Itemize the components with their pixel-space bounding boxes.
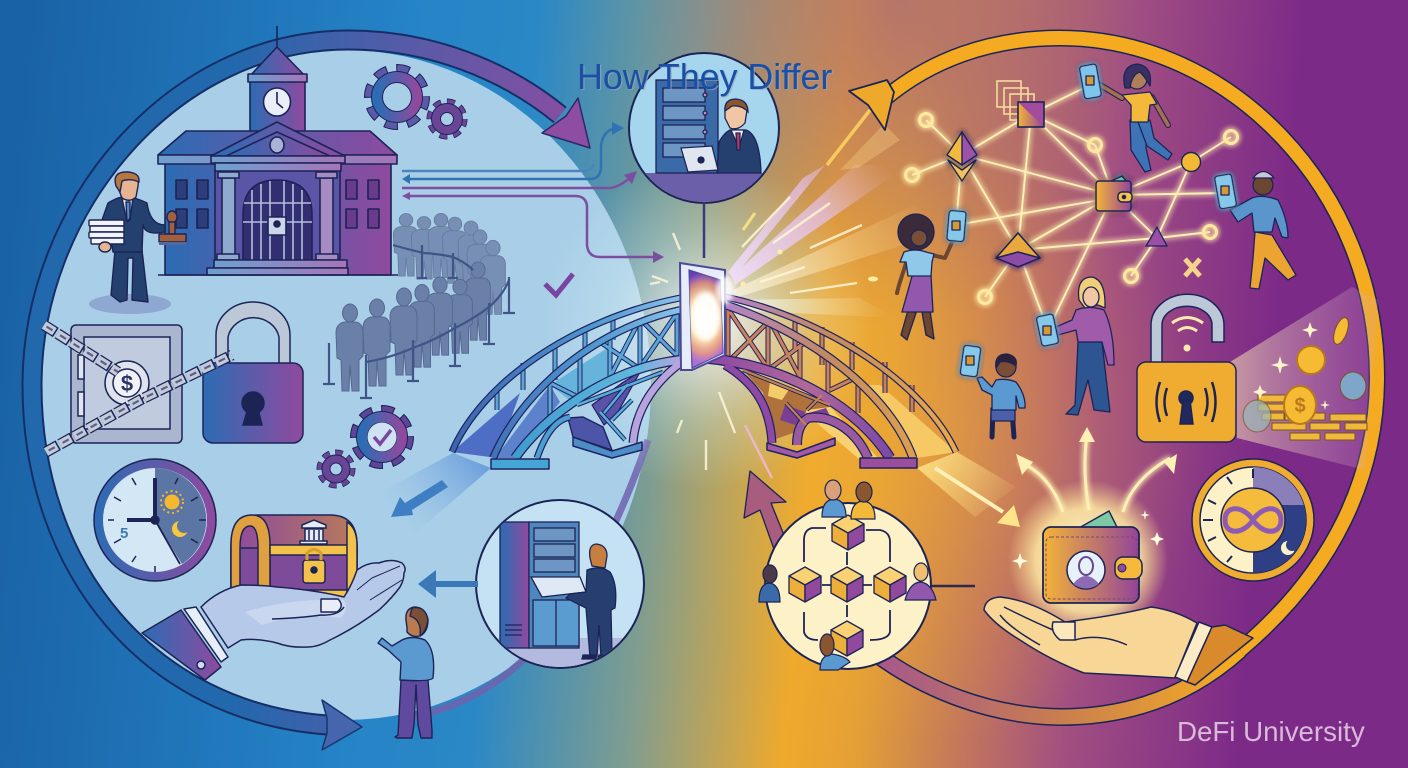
icon: checkmark (545, 274, 573, 295)
sparkles (1253, 322, 1330, 410)
title: How They Differ (577, 57, 832, 97)
portico (215, 170, 340, 262)
upward arrows from wallet (1020, 435, 1170, 512)
lower arc (875, 650, 1240, 717)
windows (176, 180, 208, 228)
fills under the arch (860, 385, 956, 458)
title: How They Differ (578, 58, 834, 98)
icon: padlock closed (203, 302, 303, 443)
icon: right open hand with cuff (984, 597, 1253, 685)
gold arc (883, 38, 1377, 650)
icon: stacked nft squares (997, 81, 1044, 127)
chords outline (704, 297, 956, 458)
icon: large gear top (369, 69, 425, 125)
queue of waiting people upper (393, 213, 505, 314)
building: institution (158, 26, 398, 275)
clock tower (250, 78, 305, 138)
icon: triangle node (1146, 227, 1167, 246)
barred gate door (243, 180, 312, 260)
left bridge footings (491, 437, 642, 469)
banker figure with papers and stamp (89, 172, 186, 314)
arrow: up-left from blockchain circle (744, 471, 790, 552)
panel: top server and operator circle (629, 53, 779, 205)
icon: locked treasure chest (231, 515, 357, 600)
blocks (832, 515, 864, 550)
panel: decentralized finance warm glow (650, 140, 1210, 740)
icon: infinity 24/7 clock (1192, 459, 1314, 581)
chords colour (452, 298, 682, 458)
person with phone blonde (1036, 277, 1114, 415)
person with phone right (1214, 172, 1296, 289)
watermark: DeFi University (1177, 716, 1365, 747)
icon: wallet node (1096, 176, 1132, 211)
lower thin ring (400, 440, 648, 719)
panel fill (39, 50, 651, 720)
glowing doorway (674, 263, 734, 370)
fills under the arch (452, 393, 520, 458)
network lines (912, 85, 1231, 330)
arrows between blocks (804, 528, 890, 640)
truss struts (728, 310, 912, 413)
walls (165, 163, 391, 275)
icon: small gear lower (320, 453, 352, 485)
stamp (159, 211, 186, 242)
icon: glowing wallet (1008, 427, 1177, 640)
person with phone top (1079, 64, 1172, 172)
icon: large gear with check (355, 410, 409, 464)
panel: server operator circle (470, 500, 650, 678)
icon: small gear top (430, 102, 464, 136)
central light halo (543, 160, 873, 490)
network ring nodes (906, 114, 1238, 304)
bridge: right arch (704, 297, 956, 468)
beam arrow to left (379, 453, 491, 537)
arrow: big left cycle ring (32, 40, 590, 725)
bridge: left arch (452, 298, 682, 469)
coin stacks: $ (1294, 395, 1306, 417)
chords outline (452, 298, 682, 458)
top tint (630, 0, 1170, 330)
icon: steel safe: $ (121, 371, 133, 396)
person with phone left (897, 210, 966, 340)
right cycle ring (875, 38, 1377, 717)
door frame (680, 263, 725, 370)
door inner (689, 270, 723, 368)
chords colour (704, 297, 956, 458)
icon: limited hours clock: 5 (120, 525, 128, 542)
arrow: bottom head of left cycle (322, 700, 362, 750)
connector from blockchain to hand (931, 585, 975, 587)
truss struts (497, 312, 678, 423)
child with phone (960, 345, 1025, 437)
beam from lock to coins (1230, 287, 1378, 470)
light rays (650, 110, 945, 478)
spire (276, 26, 278, 48)
icon: limited hours clock (94, 459, 216, 581)
queue of waiting people lower (336, 262, 490, 391)
panel: centralized finance circle (39, 50, 651, 720)
icon: x mark (1185, 259, 1200, 276)
steps (214, 260, 347, 268)
coin stacks (1243, 316, 1367, 440)
clock face (264, 88, 290, 116)
small person looking up (378, 607, 434, 738)
icon: left open hand with suit cuff (142, 560, 405, 680)
roof (158, 131, 397, 155)
columns (217, 172, 338, 260)
arrowhead of right ring (849, 80, 894, 130)
right bridge footings (767, 438, 917, 468)
beam arrow to right wallet (917, 452, 1020, 527)
connector arrows from building (402, 122, 664, 263)
icon: ethereum diamond (947, 132, 977, 181)
icon: open wifi padlock (1137, 294, 1236, 442)
chains across safe and lock (44, 325, 232, 452)
glare (692, 292, 720, 340)
peers around circle (759, 480, 936, 670)
connector: circle to door (703, 202, 705, 258)
panel: blockchain peer circle (759, 480, 936, 670)
door light (689, 274, 723, 363)
icon: pyramid node (996, 233, 1040, 267)
icon: gold coin node (1182, 152, 1200, 172)
icon: steel safe (71, 325, 182, 443)
queue ropes and posts (323, 245, 515, 398)
arrow: server to hand (418, 570, 478, 598)
